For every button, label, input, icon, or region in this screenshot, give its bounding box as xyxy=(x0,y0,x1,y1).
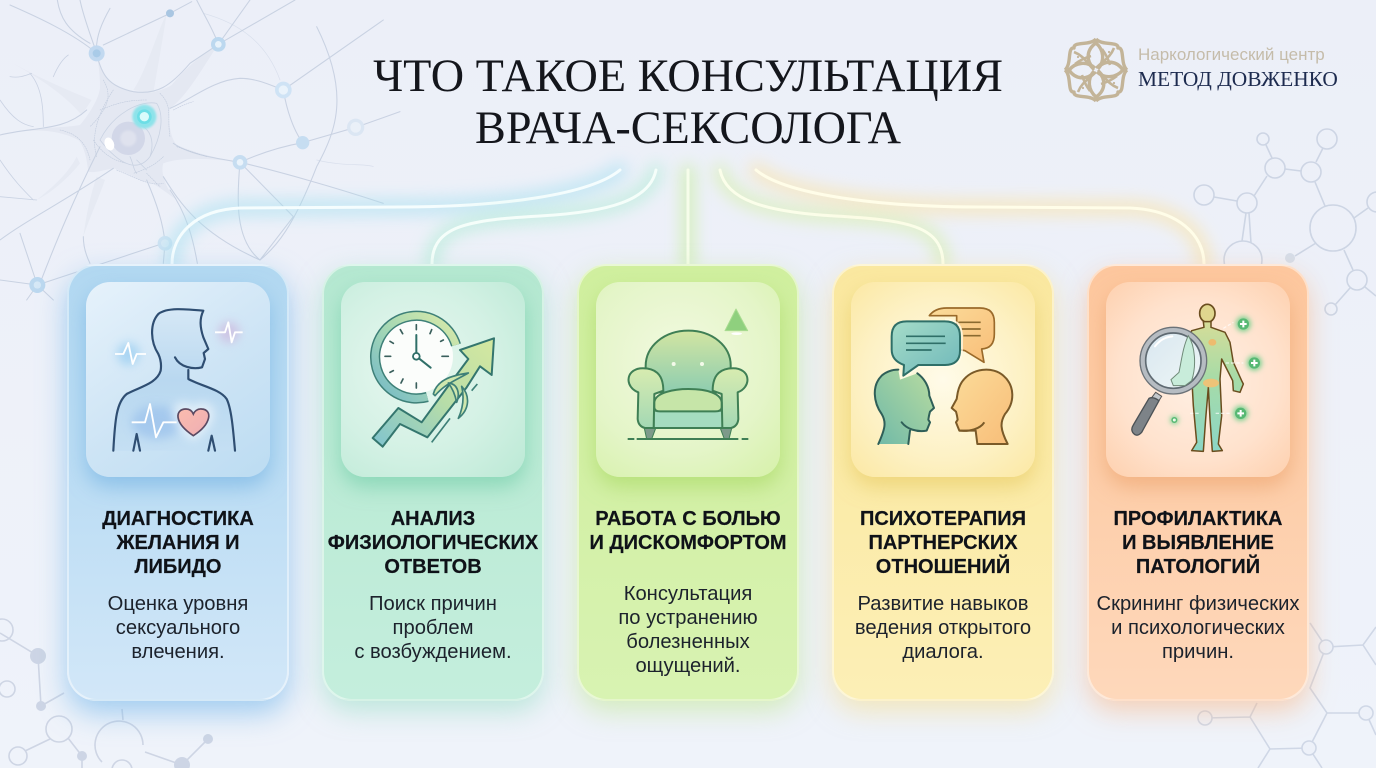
heading: ПАТОЛОГИЙ xyxy=(1136,556,1260,578)
connector 4 xyxy=(720,170,943,264)
heading: ДИАГНОСТИКА xyxy=(102,508,254,530)
body text: ведения открытого xyxy=(855,617,1031,639)
heading xyxy=(102,508,254,578)
logo block xyxy=(1064,38,1338,102)
connector 5 xyxy=(756,170,1204,264)
connector 3 xyxy=(682,170,694,264)
heading xyxy=(860,508,1026,578)
body text: влечения. xyxy=(131,641,225,663)
body text: причин. xyxy=(1162,641,1234,663)
heading: И ВЫЯВЛЕНИЕ xyxy=(1122,532,1274,554)
logo name: МЕТОД ДОВЖЕНКО xyxy=(1138,67,1338,91)
heading: ПРОФИЛАКТИКА xyxy=(1114,508,1282,530)
heading: РАБОТА С БОЛЬЮ xyxy=(595,508,781,530)
body text: Скрининг физических xyxy=(1097,593,1299,615)
panel: diagnostics xyxy=(67,264,289,701)
title: ЧТО ТАКОЕ КОНСУЛЬТАЦИЯ xyxy=(373,50,1003,101)
heading: ЛИБИДО xyxy=(135,556,221,578)
heading: ОТНОШЕНИЙ xyxy=(876,556,1010,578)
panel: prevention xyxy=(1087,264,1309,701)
icon tile: armchair xyxy=(596,282,780,477)
heading: ПСИХОТЕРАПИЯ xyxy=(860,508,1026,530)
connector 2 xyxy=(432,170,656,264)
body text: проблем xyxy=(393,617,473,639)
heading xyxy=(328,508,538,578)
heading: ЖЕЛАНИЯ И xyxy=(116,532,240,554)
connector 1 xyxy=(172,170,620,264)
panel: pain and discomfort xyxy=(577,264,799,701)
heading: ПАРТНЕРСКИХ xyxy=(868,532,1018,554)
body text xyxy=(618,583,758,677)
body text: по устранению xyxy=(618,607,758,629)
icon: magnifier over human figure xyxy=(1131,304,1266,452)
molecule: right xyxy=(1194,129,1376,315)
icon tile: magnifier and body xyxy=(1106,282,1290,477)
body text: ощущений. xyxy=(635,655,741,677)
icon: logo knot xyxy=(1064,38,1128,102)
molecule: bottom right xyxy=(1198,623,1376,768)
body text: Оценка уровня xyxy=(108,593,248,615)
body text xyxy=(1097,593,1300,663)
icon: heads and speech bubbles xyxy=(874,307,1014,445)
body text xyxy=(855,593,1031,663)
body text xyxy=(354,593,512,663)
heading xyxy=(1114,508,1282,578)
icon tile: two heads in dialogue xyxy=(851,282,1035,477)
body text: диалога. xyxy=(902,641,984,663)
heading: ФИЗИОЛОГИЧЕСКИХ xyxy=(328,532,538,554)
molecule: bottom left xyxy=(0,619,213,768)
body text: с возбуждением. xyxy=(354,641,512,663)
icon: person with heart and pulse xyxy=(112,308,243,452)
body text xyxy=(108,593,248,663)
neuron illustration xyxy=(0,0,400,300)
icon: clock with rising arrow xyxy=(370,310,495,448)
heading: И ДИСКОМФОРТОМ xyxy=(589,532,787,554)
heading: АНАЛИЗ xyxy=(391,508,475,530)
body text: сексуального xyxy=(116,617,240,639)
logo subtitle: Наркологический центр xyxy=(1138,45,1325,64)
body text: Консультация xyxy=(624,583,752,605)
body text: Развитие навыков xyxy=(857,593,1029,615)
panel: physiological analysis xyxy=(322,264,544,701)
title xyxy=(373,50,1003,153)
title: ВРАЧА-СЕКСОЛОГА xyxy=(475,102,901,153)
icon tile: clock and arrow xyxy=(341,282,525,477)
icon tile: person with heart xyxy=(86,282,270,477)
panel: partner psychotherapy xyxy=(832,264,1054,701)
body text: Поиск причин xyxy=(369,593,497,615)
heading: ОТВЕТОВ xyxy=(384,556,482,578)
heading xyxy=(589,508,787,554)
body text: и психологических xyxy=(1111,617,1285,639)
icon: armchair with triangle xyxy=(628,308,748,440)
body text: болезненных xyxy=(626,631,750,653)
